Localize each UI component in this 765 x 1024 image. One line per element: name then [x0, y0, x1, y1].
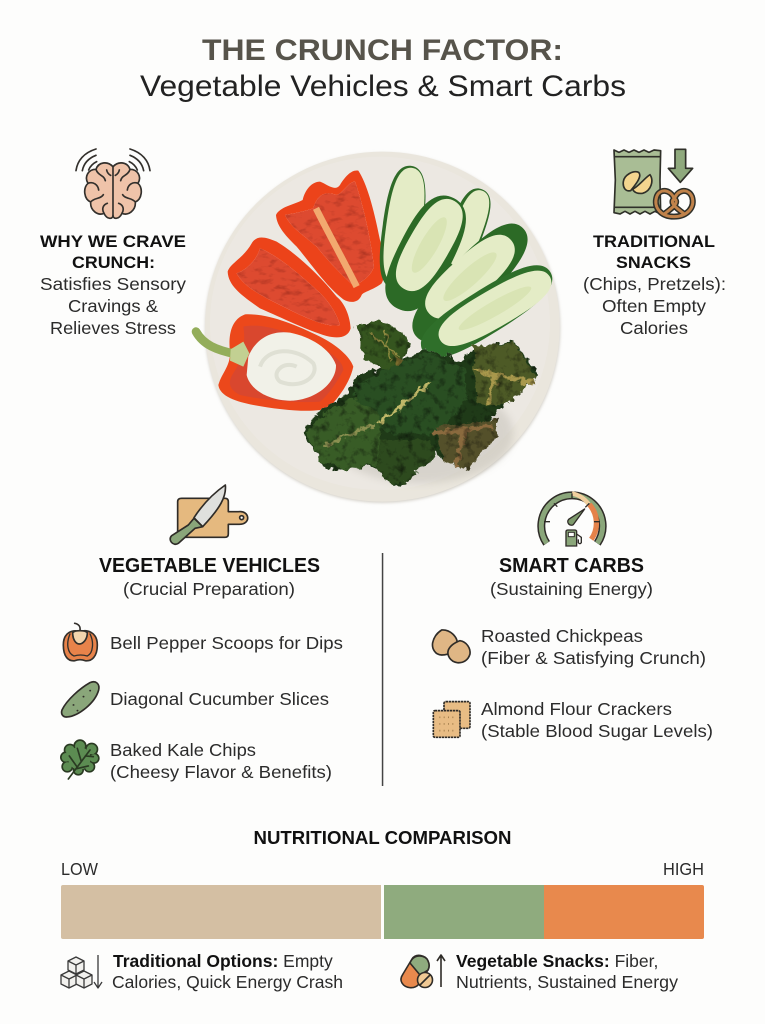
- text: vegetable snacks: [456, 951, 678, 992]
- text: traditional options: Traditional Options: Empty: [113, 951, 333, 971]
- heading: [40, 232, 186, 272]
- panel: why we crave crunch: [40, 149, 186, 338]
- list item: crackers: (Stable Blood Sugar Levels): [481, 721, 713, 741]
- heading: [593, 232, 715, 272]
- heading: WHY WE CRAVE: [40, 232, 186, 251]
- list item: crackers: Almond Flour Crackers: [481, 699, 672, 719]
- panel: smart carbs: [432, 493, 713, 741]
- cucumber slices: [373, 163, 562, 370]
- label: high: HIGH: [663, 859, 704, 879]
- bell pepper: middle slice: [228, 237, 351, 337]
- title: THE CRUNCH FACTOR:: [202, 34, 563, 67]
- icon: brain with sound waves: [76, 149, 150, 218]
- panel: nutritional comparison: [61, 828, 704, 992]
- list item: bell pepper: [63, 623, 343, 661]
- text block: Often Empty: [602, 296, 706, 316]
- text block: Relieves Stress: [50, 318, 176, 338]
- plate of vegetables: [196, 152, 562, 503]
- bell pepper with dip: [196, 314, 353, 411]
- text block: Calories: [620, 318, 688, 338]
- stem: [196, 332, 235, 354]
- subheading: (Sustaining Energy): [490, 579, 653, 599]
- divider: [382, 553, 383, 786]
- bell pepper: top slice: [276, 171, 384, 302]
- heading: TRADITIONAL: [593, 232, 715, 251]
- title: [140, 34, 626, 103]
- icon: chips bag, arrow and pretzel: [614, 149, 693, 217]
- subheading: (Crucial Preparation): [123, 579, 295, 599]
- list item: kale: [61, 740, 332, 782]
- panel: vegetable vehicles: [61, 485, 343, 782]
- text block: [40, 274, 186, 338]
- heading: CRUNCH:: [72, 253, 155, 272]
- list item: chickpeas: (Fiber & Satisfying Crunch): [481, 648, 706, 668]
- text block: Satisfies Sensory: [40, 274, 186, 294]
- text: vegetable snacks: Vegetable Snacks: Fiber,: [456, 951, 658, 971]
- list item: cucumber: Diagonal Cucumber Slices: [110, 689, 329, 709]
- title: Vegetable Vehicles & Smart Carbs: [140, 70, 626, 103]
- icon: cutting board and knife: [170, 485, 248, 544]
- comparison bar: [61, 885, 704, 939]
- text: traditional options: Calories, Quick Energy Crash: [112, 972, 343, 992]
- text block: [583, 274, 726, 338]
- list item: kale: Baked Kale Chips: [110, 740, 256, 760]
- heading: SNACKS: [616, 253, 691, 272]
- text: vegetable snacks: Nutrients, Sustained Energy: [456, 972, 678, 992]
- list item: chickpeas: Roasted Chickpeas: [481, 626, 643, 646]
- list item: chickpeas: [432, 626, 706, 668]
- list item: cucumber: [62, 682, 329, 717]
- list item: crackers: [433, 699, 713, 741]
- text: traditional options: [112, 951, 343, 992]
- heading: SMART CARBS: [499, 555, 644, 577]
- icon: energy gauge: [541, 493, 603, 546]
- list item: bell pepper: Bell Pepper Scoops for Dips: [110, 633, 343, 653]
- baked kale chips: [303, 318, 538, 487]
- panel: traditional snacks: [583, 149, 726, 338]
- heading: NUTRITIONAL COMPARISON: [254, 828, 512, 848]
- label: low: LOW: [61, 859, 98, 879]
- dip: [247, 332, 336, 401]
- text block: (Chips, Pretzels):: [583, 274, 726, 294]
- icon: sugar cubes with down arrow: [61, 955, 102, 988]
- list item: kale: (Cheesy Flavor & Benefits): [110, 762, 332, 782]
- text block: Cravings &: [68, 296, 158, 316]
- heading: VEGETABLE VEHICLES: [99, 555, 320, 577]
- plate: [205, 152, 560, 503]
- icon: pills with up arrow: [401, 955, 445, 988]
